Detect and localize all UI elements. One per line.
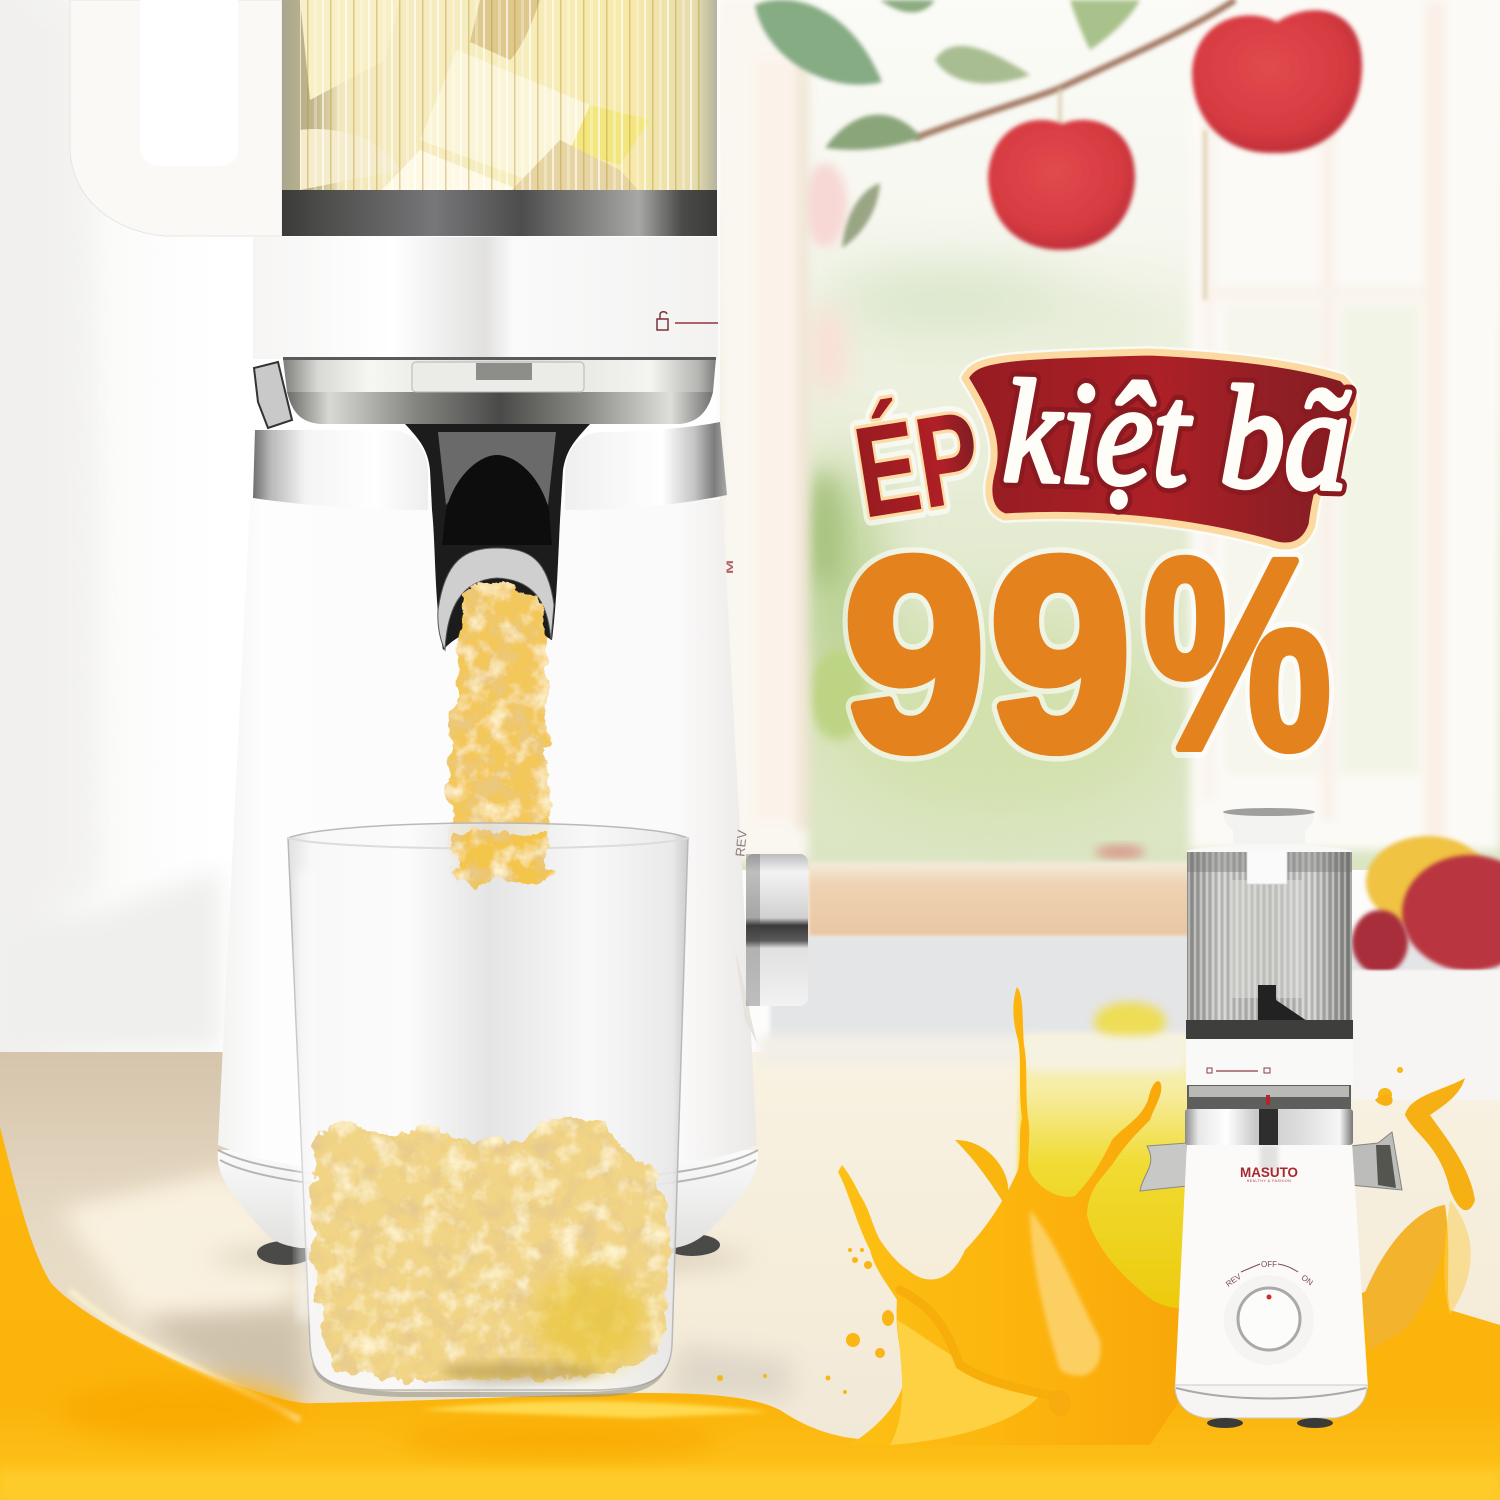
fruit bowl	[1352, 836, 1500, 1100]
lemon	[1366, 836, 1490, 928]
heading: ÉP: ÉP	[846, 383, 990, 545]
heading: ÉP: ÉP	[846, 383, 990, 545]
lid top rim	[1186, 845, 1352, 852]
fruit pieces	[300, 0, 650, 192]
main crown	[838, 987, 1180, 1445]
mango slice	[1362, 1205, 1446, 1350]
handle opening	[140, 0, 238, 166]
banner glow	[965, 352, 1354, 546]
dial indicator	[1266, 1294, 1272, 1300]
chrome ring	[1185, 1109, 1353, 1145]
spout grey panel	[438, 432, 556, 505]
tank top shade	[1187, 852, 1352, 872]
splash end drop	[1049, 1390, 1071, 1416]
table left	[0, 1052, 480, 1500]
bowl upper	[283, 358, 716, 392]
feet	[1207, 1418, 1243, 1428]
left window frame	[720, 0, 809, 860]
branch	[915, 0, 1235, 138]
garnish	[1094, 1002, 1166, 1042]
tank	[1187, 849, 1352, 1022]
splash highlight	[1030, 1210, 1101, 1376]
halo percent: %	[1143, 502, 1332, 806]
tank	[282, 0, 717, 192]
brand logo: HEALTHY & FASHION	[1247, 1179, 1291, 1183]
tank ribs	[300, 0, 700, 190]
window sill	[808, 862, 1193, 938]
left swoosh	[0, 1127, 1500, 1500]
clear bowl	[1187, 1085, 1351, 1109]
lower left wall shade	[0, 870, 220, 1050]
small juicer product	[1140, 808, 1402, 1428]
table shadow right	[670, 1345, 790, 1400]
bowl marker	[1266, 1095, 1270, 1105]
shadow	[210, 1242, 750, 1274]
spout chrome ring	[438, 548, 554, 650]
dark bottom	[440, 1363, 600, 1381]
large juicer	[70, 0, 808, 1274]
left spout	[1140, 1143, 1187, 1191]
leaves in garden	[810, 650, 866, 740]
feet	[257, 1241, 313, 1265]
digits: 9	[844, 502, 985, 806]
pulp in glass	[311, 1116, 667, 1381]
table right	[480, 1052, 1500, 1500]
juice glass behind splash	[1018, 1002, 1193, 1320]
pulp stream	[448, 586, 549, 880]
lid clip	[1247, 847, 1287, 884]
edge highlight	[70, 1290, 300, 1420]
bottom juice wave	[0, 1127, 1500, 1500]
glass	[288, 823, 688, 1390]
collar	[1186, 1036, 1353, 1086]
yellow core	[535, 1270, 645, 1370]
glass rim	[1022, 1036, 1187, 1070]
left wall panel	[0, 0, 100, 950]
side logo: M	[725, 560, 735, 574]
rim	[283, 357, 716, 360]
lower lobe	[890, 1320, 1040, 1445]
branch and apples	[755, 0, 1362, 300]
tab dark	[476, 363, 532, 380]
base	[218, 1150, 758, 1248]
dial labels	[1224, 1260, 1315, 1289]
tab	[412, 362, 584, 392]
dial plate	[1224, 1275, 1314, 1365]
splash ribbon	[900, 1290, 1060, 1398]
light top of wave	[420, 1401, 770, 1418]
heading banner	[965, 349, 1354, 546]
yellow lower band	[0, 1470, 1500, 1500]
body	[1175, 1142, 1368, 1388]
body	[218, 500, 757, 1179]
lock icon and line	[657, 312, 718, 330]
spout dome	[442, 455, 552, 545]
bowl light strip	[1189, 1086, 1349, 1097]
dial labels: REV	[1224, 1272, 1243, 1289]
left clip	[254, 362, 292, 428]
table wall blur	[760, 1035, 1500, 1065]
script text halo: kiệt bã	[1001, 349, 1352, 521]
collar	[253, 237, 718, 359]
base	[1175, 1385, 1367, 1418]
lower wall	[770, 936, 1500, 1061]
right splash veil	[1444, 1200, 1471, 1315]
dark tank band	[282, 190, 717, 236]
inner strainer	[1232, 880, 1302, 998]
base chrome line	[218, 1150, 758, 1194]
bowl lower	[287, 392, 713, 424]
big number 99%	[844, 502, 1332, 806]
chrome left	[253, 430, 428, 510]
juice splash	[717, 987, 1475, 1445]
table shadow under glass	[140, 1310, 310, 1400]
base chrome line	[1176, 1388, 1366, 1398]
apple: centre	[988, 120, 1135, 250]
dial labels: OFF	[1261, 1260, 1277, 1269]
right splash	[1405, 1078, 1475, 1210]
deep orange tones	[60, 1380, 300, 1440]
black spout	[405, 424, 590, 650]
right spout	[1350, 1132, 1402, 1190]
brand logo: MASUTO	[1240, 1164, 1298, 1180]
right spout dark	[1376, 1145, 1396, 1188]
chrome dark seam	[1259, 1109, 1278, 1145]
glass base	[312, 1355, 670, 1397]
dial knob	[1238, 1288, 1300, 1350]
halo digits: 9	[844, 502, 985, 806]
glass	[1018, 1035, 1193, 1320]
body seam shade	[1260, 1145, 1278, 1171]
fruit cube	[420, 50, 590, 190]
pusher top	[1223, 808, 1315, 816]
digits: 9	[990, 502, 1131, 806]
window view	[720, 0, 1500, 870]
droplets	[717, 1067, 1403, 1394]
pusher	[1223, 812, 1314, 844]
pulp over stream in glass	[455, 830, 550, 884]
script text: kiệt bã: kiệt bã	[1001, 349, 1352, 521]
dark band	[1186, 1020, 1353, 1039]
apple: upper right	[1192, 10, 1362, 153]
bowl	[1352, 970, 1500, 1100]
tank ribs	[1187, 852, 1352, 1022]
lock slider	[1207, 1068, 1270, 1073]
small apple	[1352, 910, 1408, 974]
glass body	[288, 823, 688, 1390]
red apple	[1402, 855, 1500, 971]
REV label on body: REV	[732, 829, 750, 857]
chrome right	[565, 422, 727, 510]
banner shape	[965, 352, 1354, 546]
blurred garden foliage	[805, 270, 1190, 820]
table light patches	[60, 1170, 310, 1320]
side branch	[955, 1140, 1008, 1205]
leaves	[755, 0, 1140, 248]
dial knob	[735, 854, 808, 1045]
right window frame	[1190, 0, 1500, 850]
percent: %	[1143, 502, 1332, 806]
handle	[70, 0, 282, 236]
left wall	[0, 0, 720, 1060]
dial labels: ON	[1300, 1273, 1315, 1287]
halo digits: 9	[990, 502, 1131, 806]
clear bowl	[283, 357, 716, 424]
rim	[288, 838, 688, 848]
inner auger	[1258, 985, 1310, 1023]
left edge reflection	[297, 870, 311, 1320]
